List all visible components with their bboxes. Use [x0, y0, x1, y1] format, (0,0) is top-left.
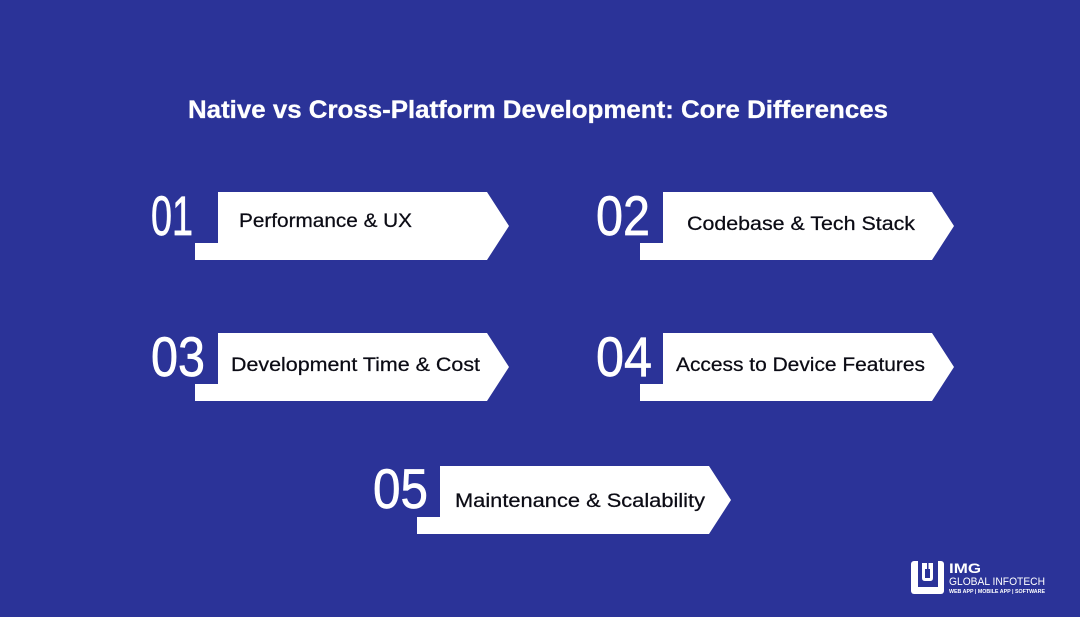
company logo — [911, 560, 1045, 595]
item 05: Maintenance & Scalability — [373, 457, 731, 534]
logo tagline: WEB APP | MOBILE APP | SOFTWARE — [949, 589, 1045, 595]
arrow panel 01 — [195, 192, 509, 260]
item 02: Codebase & Tech Stack — [596, 184, 954, 260]
icon: logo mark — [911, 561, 944, 594]
label 02: Codebase & Tech Stack — [687, 213, 915, 235]
item 04: Access to Device Features — [596, 325, 954, 401]
arrow panel 02 — [640, 192, 954, 260]
number 03: 03 — [151, 325, 205, 388]
logo wordmark: Global Infotech: GLOBAL INFOTECH — [949, 576, 1045, 588]
item 01: Performance & UX — [151, 184, 509, 260]
arrow panel 04 — [640, 333, 954, 401]
number 01: 01 — [151, 184, 193, 247]
number 05: 05 — [373, 457, 428, 520]
arrow panel 03 — [195, 333, 509, 401]
label 01: Performance & UX — [239, 210, 412, 232]
item 03: Development Time & Cost — [151, 325, 509, 401]
label 03: Development Time & Cost — [231, 354, 481, 376]
title: Native vs Cross-Platform Development: Core Differences — [188, 96, 888, 124]
logo wordmark: IMG: IMG — [949, 560, 981, 576]
label 04: Access to Device Features — [676, 354, 925, 376]
arrow panel 05 — [417, 466, 731, 534]
label 05: Maintenance & Scalability — [455, 490, 705, 512]
number 04: 04 — [596, 325, 652, 388]
number 02: 02 — [596, 184, 650, 247]
